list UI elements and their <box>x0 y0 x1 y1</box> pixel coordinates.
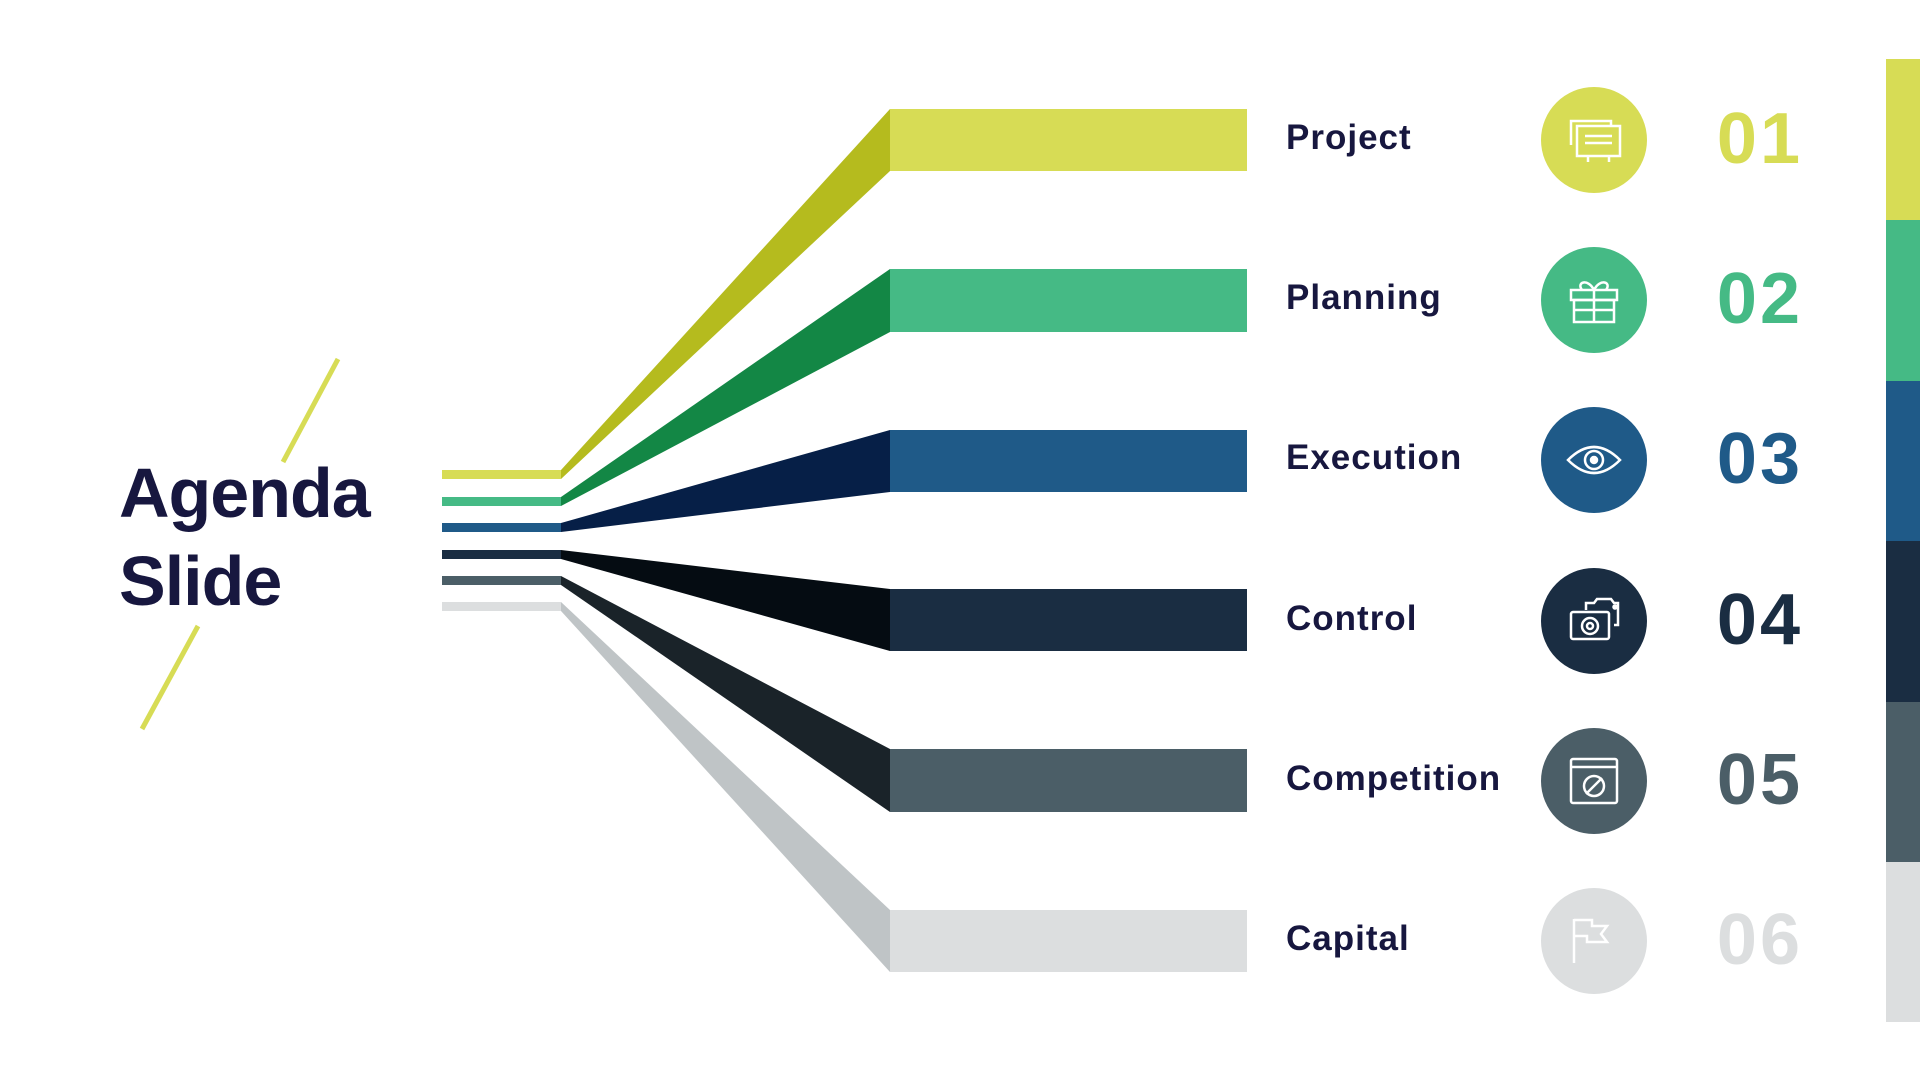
title <box>119 454 372 620</box>
bars <box>890 109 1247 972</box>
icon: browser compass <box>1571 759 1617 803</box>
icon: cameras <box>1571 599 1618 639</box>
small stacked bars <box>442 470 561 611</box>
icon: gift <box>1571 282 1617 322</box>
labels <box>1286 118 1501 958</box>
labels: Capital <box>1286 919 1410 958</box>
icon circles <box>1541 87 1647 994</box>
decorative slash top <box>283 359 338 462</box>
labels: Competition <box>1286 759 1501 798</box>
title: Agenda <box>119 454 372 532</box>
right color strip <box>1886 59 1920 1022</box>
numbers: 02 <box>1717 259 1803 339</box>
icon: presentation <box>1571 121 1620 162</box>
numbers: 01 <box>1717 99 1803 179</box>
icon: eye <box>1568 447 1620 473</box>
icon: flag <box>1574 919 1607 963</box>
labels: Project <box>1286 118 1412 157</box>
decorative slash bottom <box>142 626 198 729</box>
numbers: 05 <box>1717 740 1803 820</box>
labels: Planning <box>1286 278 1442 317</box>
numbers: 06 <box>1717 900 1803 980</box>
title: Slide <box>119 542 281 620</box>
numbers: 04 <box>1717 580 1803 660</box>
labels: Control <box>1286 599 1417 638</box>
labels: Execution <box>1286 438 1462 477</box>
numbers <box>1717 99 1803 980</box>
numbers: 03 <box>1717 419 1803 499</box>
connectors <box>561 109 890 972</box>
